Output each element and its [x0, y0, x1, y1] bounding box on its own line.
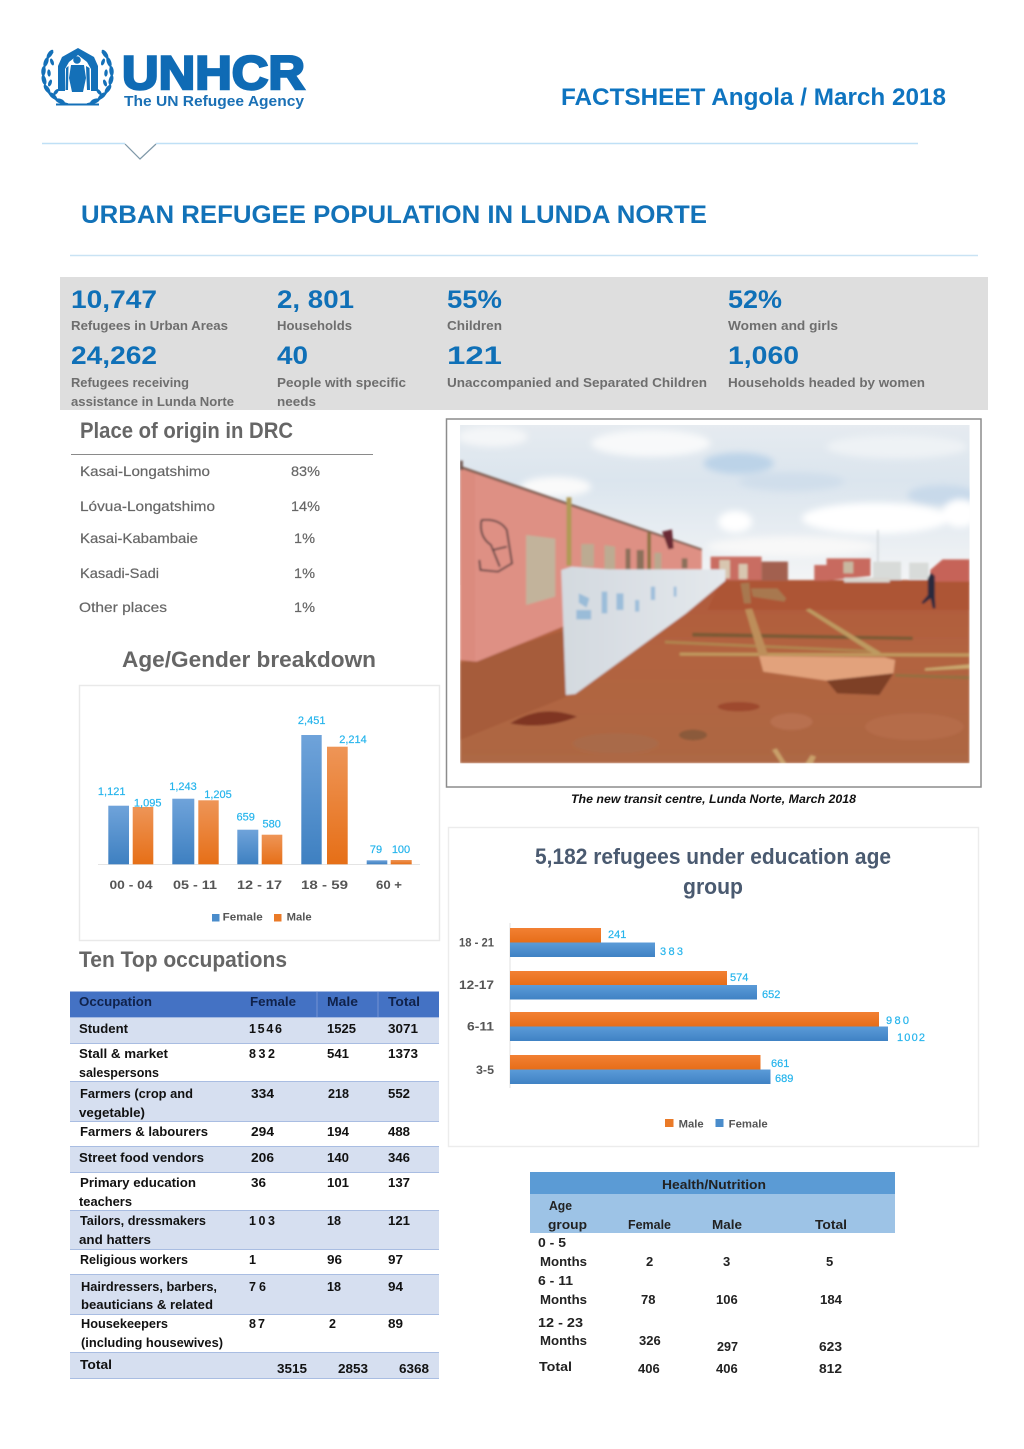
- row: Farmers and labourers: 294: [251, 1125, 274, 1139]
- stat: refugees receiving assistance: 24,262: [71, 342, 157, 370]
- category labels: [110, 878, 402, 892]
- row: 6-11 months: 106: [716, 1292, 738, 1307]
- row: Lovua-Longatshimo: 14%: [291, 498, 320, 514]
- column headers: Female: [628, 1217, 671, 1232]
- chart: age/gender column chart: [80, 686, 440, 940]
- heading: age/gender breakdown: Age/Gender breakdown: [122, 647, 376, 672]
- table title band: [530, 1172, 895, 1194]
- row: Primary education teachers: 36: [251, 1176, 266, 1190]
- table header: Female: [250, 994, 296, 1009]
- logo: UNHCR: [41, 46, 305, 110]
- table: health and nutrition: [530, 1172, 895, 1376]
- row: Primary education teachers: [79, 1176, 410, 1209]
- stat: people with specific needs: 40: [277, 342, 308, 370]
- stat: refugees in urban areas: [71, 286, 228, 333]
- row: Tailors, dressmakers and hatters: Tailors, dressmakers: [80, 1214, 206, 1228]
- row: Farmers crop and vegetable: 218: [328, 1087, 349, 1101]
- row: Farmers crop and vegetable: Farmers (crop and: [80, 1087, 193, 1101]
- category labels: 60 +: [376, 878, 402, 892]
- row: total: Total: [539, 1359, 572, 1374]
- row: total: 812: [819, 1361, 842, 1376]
- row: 0-5 months: 2: [646, 1254, 653, 1269]
- row: Street food vendors: [79, 1151, 410, 1165]
- row: Farmers and labourers: Farmers & labourers: [80, 1125, 208, 1139]
- row: Kasai-Kabambaie: 1%: [294, 530, 315, 546]
- stat: households: 2, 801: [277, 286, 354, 314]
- category labels: 12 - 17: [237, 878, 282, 892]
- row: Other places: [79, 599, 315, 615]
- row: Kasai-Longatshimo: [80, 463, 320, 479]
- row: Total: 6368: [399, 1362, 429, 1376]
- header rule with notch: [42, 144, 918, 159]
- category labels: [459, 936, 494, 1077]
- row: Primary education teachers: 101: [327, 1176, 349, 1190]
- row: 0-5 months: 5: [826, 1254, 833, 1269]
- column headers: group: [548, 1217, 587, 1232]
- row: Primary education teachers: 137: [388, 1176, 410, 1190]
- row: Religious workers: 97: [388, 1253, 403, 1267]
- row: Lovua-Longatshimo: [80, 498, 320, 514]
- bars: 18-21: [510, 928, 683, 958]
- data labels: 79: [370, 844, 382, 856]
- row: Student: 1546: [249, 1022, 282, 1036]
- row: Hairdressers, barbers, beauticians: 94: [388, 1280, 403, 1294]
- row: Student: 3071: [388, 1022, 418, 1036]
- far buildings: [711, 557, 762, 580]
- bars: 6-11: 980: [886, 1015, 909, 1027]
- bars: 18-59: [301, 735, 348, 864]
- row: Kasadi-Sadi: [80, 565, 315, 581]
- data labels: 100: [392, 844, 410, 856]
- row: Farmers crop and vegetable: 552: [388, 1087, 410, 1101]
- bars: 05-11: [172, 799, 219, 864]
- stat: refugees in urban areas: 10,747: [71, 286, 157, 314]
- table header: Male: [327, 994, 358, 1009]
- category labels: 00 - 04: [110, 878, 153, 892]
- stat: women and girls: [728, 286, 838, 333]
- data labels: 580: [263, 819, 281, 831]
- row: 0-5 months: 3: [723, 1254, 730, 1269]
- row: Religious workers: 96: [327, 1253, 342, 1267]
- row: Street food vendors: Street food vendors: [79, 1151, 204, 1165]
- row: Farmers crop and vegetable: [79, 1087, 410, 1120]
- bars: 12-17: [510, 971, 780, 1001]
- row: total: 406: [716, 1361, 738, 1376]
- laurel right: [87, 49, 114, 105]
- row: Kasai-Longatshimo: Kasai-Longatshimo: [80, 463, 210, 479]
- row: Farmers and labourers: 194: [327, 1125, 349, 1139]
- bars: 18-21: 241: [608, 929, 626, 941]
- column headers: Total: [815, 1217, 847, 1232]
- table title band: Health/Nutrition: [662, 1177, 766, 1192]
- heading: factsheet: FACTSHEET Angola / March 2018: [561, 84, 946, 111]
- row: 6-11 months: 78: [641, 1292, 655, 1307]
- column headers: Male: [712, 1217, 742, 1232]
- row: Student: [79, 1022, 418, 1036]
- row: Housekeepers: 2: [329, 1317, 336, 1331]
- legend: Male: [287, 912, 312, 924]
- heading: ten top occupations: Ten Top occupations: [79, 947, 287, 972]
- row: Farmers and labourers: [80, 1125, 410, 1139]
- row: Tailors, dressmakers and hatters: and hatters: [79, 1233, 151, 1247]
- legend: Male: [679, 1118, 704, 1130]
- row: 6-11 months: 184: [820, 1292, 843, 1307]
- category labels: 18 - 59: [301, 878, 348, 892]
- category labels: 05 - 11: [173, 878, 217, 892]
- row: 12-23 months: 623: [819, 1339, 842, 1354]
- row: Kasai-Kabambaie: Kasai-Kabambaie: [80, 530, 198, 546]
- row: Farmers crop and vegetable: 334: [251, 1087, 274, 1101]
- row: Religious workers: Religious workers: [80, 1253, 188, 1267]
- row: 0-5 months: [538, 1235, 833, 1269]
- bars: 12-17: 652: [762, 989, 780, 1001]
- row: Kasadi-Sadi: 1%: [294, 565, 315, 581]
- row: Street food vendors: 346: [388, 1151, 410, 1165]
- bars: 3-5: 689: [775, 1073, 793, 1085]
- row: Other places: 1%: [294, 599, 315, 615]
- data labels: 2,214: [339, 734, 367, 746]
- row: Stall and market salespersons: salespersons: [79, 1066, 159, 1080]
- row: Student: Student: [79, 1022, 129, 1036]
- stat: women and girls: Women and girls: [728, 318, 838, 333]
- stat: people with specific needs: People with specific: [277, 375, 406, 390]
- heading: place of origin: Place of origin in DRC: [80, 418, 293, 443]
- bars: 12-17: 574: [730, 972, 748, 984]
- stat: refugees in urban areas: Refugees in Urban Areas: [71, 318, 228, 333]
- row: Hairdressers, barbers, beauticians: 18: [327, 1280, 341, 1294]
- tarpaulin: [561, 567, 725, 695]
- data labels: 1,243: [169, 781, 197, 793]
- legend: [212, 912, 312, 924]
- row: Tailors, dressmakers and hatters: [79, 1214, 410, 1247]
- row: Primary education teachers: teachers: [79, 1195, 132, 1209]
- title: URBAN REFUGEE POPULATION IN LUNDA NORTE: [81, 201, 707, 229]
- photo caption: The new transit centre, Lunda Norte, March 2018: [571, 794, 857, 806]
- row: 0-5 months: 0 - 5: [538, 1235, 566, 1250]
- row: Stall and market salespersons: 1373: [388, 1047, 418, 1061]
- category labels: 6-11: [467, 1020, 494, 1034]
- bars: 00-04: [108, 806, 153, 864]
- icon: UNHCR emblem: [41, 48, 114, 106]
- row: total: 406: [638, 1361, 660, 1376]
- row: Student: 1525: [327, 1022, 356, 1036]
- stat: households headed by women: Households headed by women: [728, 375, 925, 390]
- stat: households headed by women: 1,060: [728, 342, 799, 370]
- row: 6-11 months: 6 - 11: [538, 1273, 573, 1288]
- bars: 60+: [367, 860, 412, 864]
- data labels: 1,121: [98, 786, 125, 798]
- row: Other places: Other places: [79, 599, 167, 615]
- row: Total: 2853: [338, 1362, 368, 1376]
- table header: Occupation: [79, 994, 152, 1009]
- row: Tailors, dressmakers and hatters: 103: [249, 1214, 275, 1228]
- stat: refugees receiving assistance: assistance in Lunda Norte: [71, 394, 234, 409]
- wordmark: UNHCR: [122, 46, 305, 99]
- row: Housekeepers: [81, 1317, 403, 1350]
- row: Total: Total: [80, 1358, 112, 1372]
- chart title: 5,182 refugees under education age: [535, 844, 891, 869]
- row: Tailors, dressmakers and hatters: 121: [388, 1214, 410, 1228]
- row: Hairdressers, barbers, beauticians: Hairdressers, barbers,: [81, 1280, 217, 1294]
- row: Housekeepers: (including housewives): [81, 1336, 223, 1350]
- row: 12-23 months: 326: [639, 1333, 661, 1348]
- graffiti: [479, 520, 512, 572]
- table: occupations: [70, 992, 439, 1378]
- laurel left: [41, 49, 68, 105]
- bars: 3-5: [510, 1055, 793, 1085]
- row: Stall and market salespersons: 541: [327, 1047, 349, 1061]
- row: Hairdressers, barbers, beauticians: 76: [249, 1280, 266, 1294]
- panel: key figures: [60, 277, 988, 410]
- row: 0-5 months: Months: [540, 1254, 587, 1269]
- stat: households headed by women: [728, 342, 925, 390]
- legend: Female: [729, 1118, 768, 1130]
- row: Kasai-Kabambaie: [80, 530, 315, 546]
- row: total: [539, 1359, 842, 1376]
- row: Lovua-Longatshimo: Lóvua-Longatshimo: [80, 498, 215, 514]
- chart title: [535, 844, 891, 899]
- stat: children: [447, 286, 502, 333]
- row: Farmers and labourers: 488: [388, 1125, 410, 1139]
- row: Religious workers: [80, 1253, 403, 1267]
- stat: unaccompanied children: 121: [447, 342, 502, 370]
- stat: children: Children: [447, 318, 502, 333]
- data labels: 2,451: [298, 715, 325, 727]
- stat: refugees receiving assistance: Refugees receiving: [71, 375, 189, 390]
- person: [921, 573, 936, 608]
- bars: 3-5: 661: [771, 1058, 789, 1070]
- main building wall: [460, 467, 725, 662]
- row: Religious workers: 1: [249, 1253, 256, 1267]
- row: Total: [80, 1358, 429, 1376]
- bars: 12-17: [237, 830, 282, 864]
- chart title: group: [683, 874, 743, 899]
- table header: Total: [388, 994, 420, 1009]
- stat: refugees receiving assistance: [71, 342, 234, 409]
- row: 12-23 months: Months: [540, 1333, 587, 1348]
- row: Kasadi-Sadi: Kasadi-Sadi: [80, 565, 159, 581]
- row: Street food vendors: 206: [251, 1151, 274, 1165]
- row: Kasai-Longatshimo: 83%: [291, 463, 320, 479]
- stat: households: [277, 286, 354, 333]
- legend: [665, 1118, 768, 1130]
- row: Hairdressers, barbers, beauticians: [81, 1280, 403, 1312]
- stat: unaccompanied children: [447, 342, 707, 390]
- photo: transit centre: [446, 419, 981, 787]
- row backgrounds: [70, 1018, 439, 1378]
- row: Total: 3515: [277, 1362, 307, 1376]
- row: Housekeepers: Housekeepers: [81, 1317, 168, 1331]
- row: 12-23 months: 12 - 23: [538, 1315, 583, 1330]
- poles and rubble: [692, 633, 913, 640]
- stat: households: Households: [277, 318, 352, 333]
- row: 12-23 months: [538, 1315, 842, 1354]
- row: Stall and market salespersons: 832: [249, 1047, 275, 1061]
- data labels: 1,205: [204, 789, 232, 801]
- bars: 6-11: 1002: [897, 1032, 925, 1044]
- category labels: 18 - 21: [459, 936, 494, 950]
- category labels: 12-17: [459, 978, 494, 992]
- stat: people with specific needs: [277, 342, 406, 409]
- row: 12-23 months: 297: [717, 1339, 738, 1354]
- bars: 6-11: [510, 1012, 925, 1044]
- windows: [526, 535, 555, 605]
- stat: women and girls: 52%: [728, 286, 782, 314]
- ground: [460, 580, 970, 763]
- column headers: Age: [549, 1198, 572, 1213]
- table header: [70, 992, 439, 1018]
- stat: people with specific needs: needs: [277, 394, 316, 409]
- bars: 18-21: 383: [660, 946, 683, 958]
- stat: children: 55%: [447, 286, 502, 314]
- chart: education age group bars: [448, 828, 978, 1146]
- row: 6-11 months: Months: [540, 1292, 587, 1307]
- row: Primary education teachers: Primary education: [80, 1176, 196, 1190]
- tagline: The UN Refugee Agency: [124, 93, 305, 110]
- row: Stall and market salespersons: Stall & market: [79, 1047, 169, 1061]
- data labels: [98, 715, 410, 856]
- row: Hairdressers, barbers, beauticians: beauticians & related: [81, 1298, 213, 1312]
- row: Housekeepers: 89: [388, 1317, 403, 1331]
- data labels: 1,095: [134, 798, 161, 810]
- legend: Female: [223, 912, 263, 924]
- stat: unaccompanied children: Unaccompanied and Separated Children: [447, 375, 707, 390]
- column headers: [530, 1194, 895, 1233]
- row: 6-11 months: [538, 1273, 843, 1307]
- data labels: 659: [237, 812, 255, 824]
- row: Tailors, dressmakers and hatters: 18: [327, 1214, 341, 1228]
- row: Housekeepers: 87: [249, 1317, 265, 1331]
- row: Street food vendors: 140: [327, 1151, 349, 1165]
- panel: place of origin: [71, 418, 373, 615]
- row: Stall and market salespersons: [79, 1047, 418, 1080]
- category labels: 3-5: [476, 1063, 494, 1077]
- row: Farmers crop and vegetable: vegetable): [79, 1106, 145, 1120]
